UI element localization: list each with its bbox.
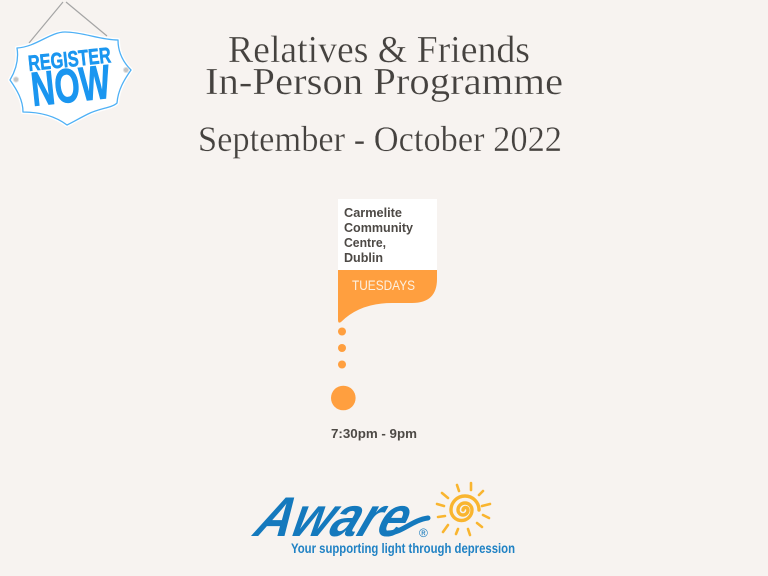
card orange flag [338, 270, 437, 323]
card day label: TUESDAYS [352, 278, 415, 293]
title: Relatives & Friends [228, 29, 530, 71]
logo wordmark: Aware [245, 486, 422, 548]
subtitle: dates: September - October 2022 [198, 119, 562, 159]
sign blue outline [10, 32, 131, 125]
sign screws [13, 67, 129, 82]
time label: 7:30pm - 9pm [331, 426, 417, 441]
card location text: Carmelite [344, 205, 402, 220]
location card [338, 199, 437, 323]
logo sun icon [437, 483, 490, 535]
title [205, 29, 563, 103]
sign hanging strings [29, 2, 107, 43]
card location text [344, 205, 414, 265]
badge: register now sign [10, 2, 131, 125]
card location text: Centre, [344, 235, 386, 250]
card white panel [338, 199, 437, 270]
title: In-Person Programme [205, 61, 563, 103]
sign text: now: NOW [29, 56, 113, 117]
card location text: Dublin [344, 250, 383, 265]
card location text: Community [344, 220, 414, 235]
logo registered mark: ® [419, 526, 428, 540]
sign white plate [10, 32, 131, 125]
sign text: register: REGISTER [27, 42, 112, 76]
timeline dots [331, 328, 356, 410]
logo: aware [245, 483, 515, 556]
logo tagline: Your supporting light through depression [291, 541, 515, 556]
